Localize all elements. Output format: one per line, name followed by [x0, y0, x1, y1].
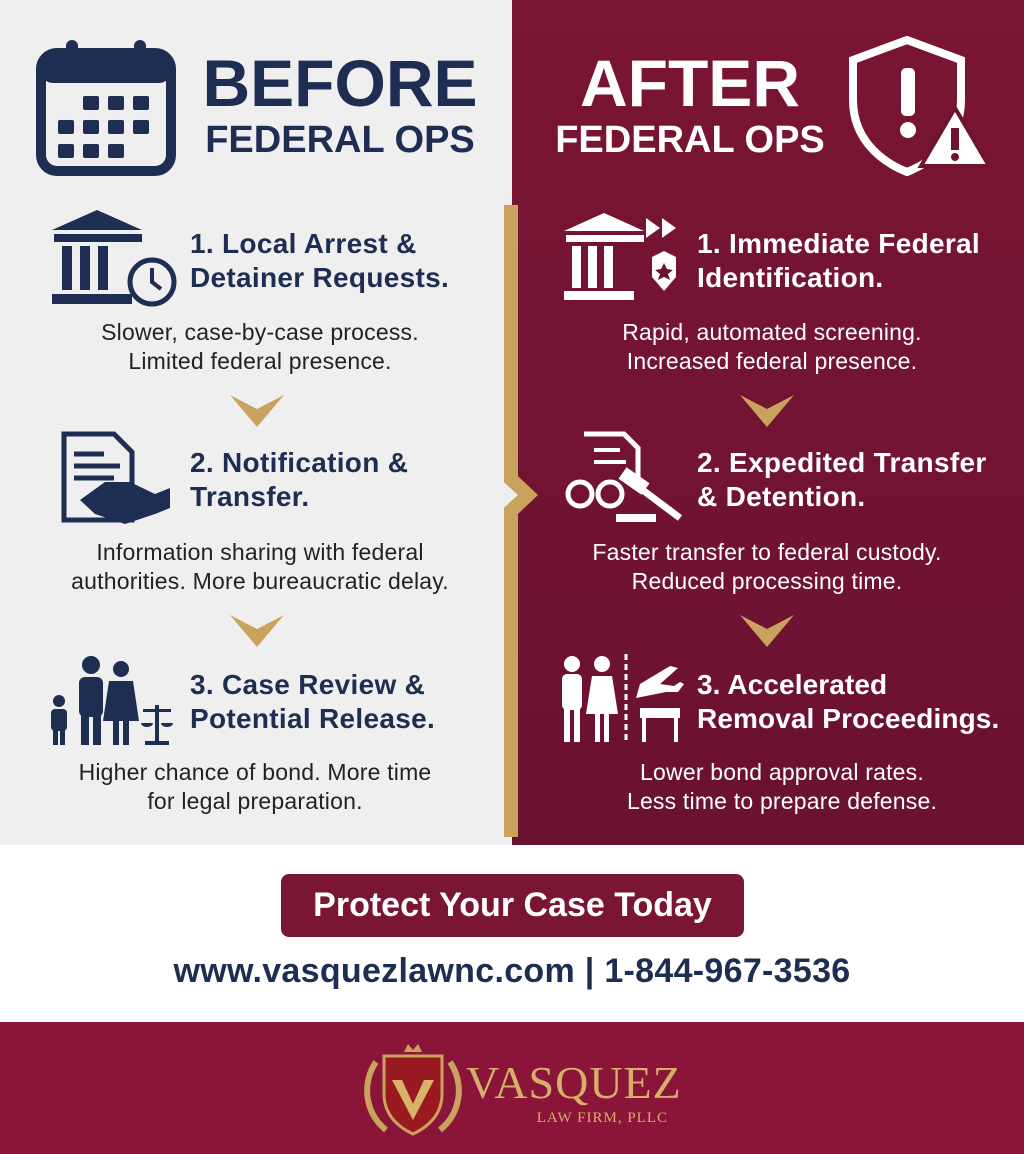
text	[101, 319, 419, 374]
text	[622, 319, 922, 374]
text: authorities. More bureaucratic delay.	[71, 568, 449, 594]
heading	[190, 447, 408, 512]
step 2 after	[566, 432, 987, 594]
heading	[697, 447, 987, 512]
step 3 after	[562, 654, 999, 814]
title: before: FEDERAL OPS	[205, 119, 475, 161]
heading: Detainer Requests.	[190, 262, 449, 293]
text: Increased federal presence.	[627, 348, 917, 374]
title: before: BEFORE	[202, 46, 478, 120]
heading: & Detention.	[697, 481, 865, 512]
text	[592, 539, 942, 594]
title: after: FEDERAL OPS	[555, 119, 825, 161]
heading: Identification.	[697, 262, 884, 293]
text: Limited federal presence.	[128, 348, 392, 374]
heading: 1. Immediate Federal	[697, 228, 980, 259]
step 2 before	[62, 432, 449, 594]
text: Higher chance of bond. More time	[79, 759, 431, 785]
arrow	[740, 395, 794, 427]
step 1 before	[52, 210, 449, 374]
icon: courthouse badge	[564, 213, 676, 300]
panel: after	[512, 0, 1024, 845]
text: for legal preparation.	[147, 788, 363, 814]
text: Less time to prepare defense.	[627, 788, 937, 814]
icon: document handshake	[62, 432, 170, 524]
icon: family scales	[51, 656, 173, 745]
title: after: AFTER	[580, 46, 800, 120]
step 3 before	[51, 656, 435, 814]
step 1 after	[564, 213, 980, 374]
icon: cuffs gavel	[566, 432, 682, 522]
arrow	[230, 615, 284, 647]
text: Information sharing with federal	[96, 539, 424, 565]
heading: 3. Accelerated	[697, 669, 887, 700]
heading: Transfer.	[190, 481, 309, 512]
text: Lower bond approval rates.	[640, 759, 924, 785]
heading	[190, 228, 449, 293]
panel: before	[0, 0, 512, 845]
heading: Removal Proceedings.	[697, 703, 999, 734]
heading	[697, 669, 999, 734]
logo: VASQUEZ	[466, 1057, 682, 1108]
contact: www.vasquezlawnc.com | 1-844-967-3536	[173, 952, 850, 990]
cta button: Protect Your Case Today	[313, 886, 712, 924]
heading: 2. Expedited Transfer	[697, 447, 987, 478]
heading: 3. Case Review &	[190, 669, 425, 700]
text	[79, 759, 431, 814]
cta button	[281, 874, 744, 937]
text: Faster transfer to federal custody.	[592, 539, 942, 565]
logo	[364, 1044, 682, 1136]
title: after	[555, 46, 825, 161]
heading: Potential Release.	[190, 703, 435, 734]
divider with chevron	[504, 205, 538, 837]
heading: 2. Notification &	[190, 447, 408, 478]
text: Rapid, automated screening.	[622, 319, 922, 345]
footer	[0, 1022, 1024, 1154]
logo: LAW FIRM, PLLC	[537, 1110, 668, 1126]
text: Slower, case-by-case process.	[101, 319, 419, 345]
title: before	[202, 46, 478, 161]
heading	[190, 669, 435, 734]
heading	[697, 228, 980, 293]
text	[627, 759, 937, 814]
heading: 1. Local Arrest &	[190, 228, 417, 259]
icon: calendar	[36, 40, 176, 176]
icon: shield warning	[849, 36, 992, 176]
icon: people plane barrier	[562, 654, 684, 742]
text: Reduced processing time.	[632, 568, 902, 594]
arrow	[740, 615, 794, 647]
icon: courthouse clock	[52, 210, 176, 306]
text	[71, 539, 449, 594]
arrow	[230, 395, 284, 427]
